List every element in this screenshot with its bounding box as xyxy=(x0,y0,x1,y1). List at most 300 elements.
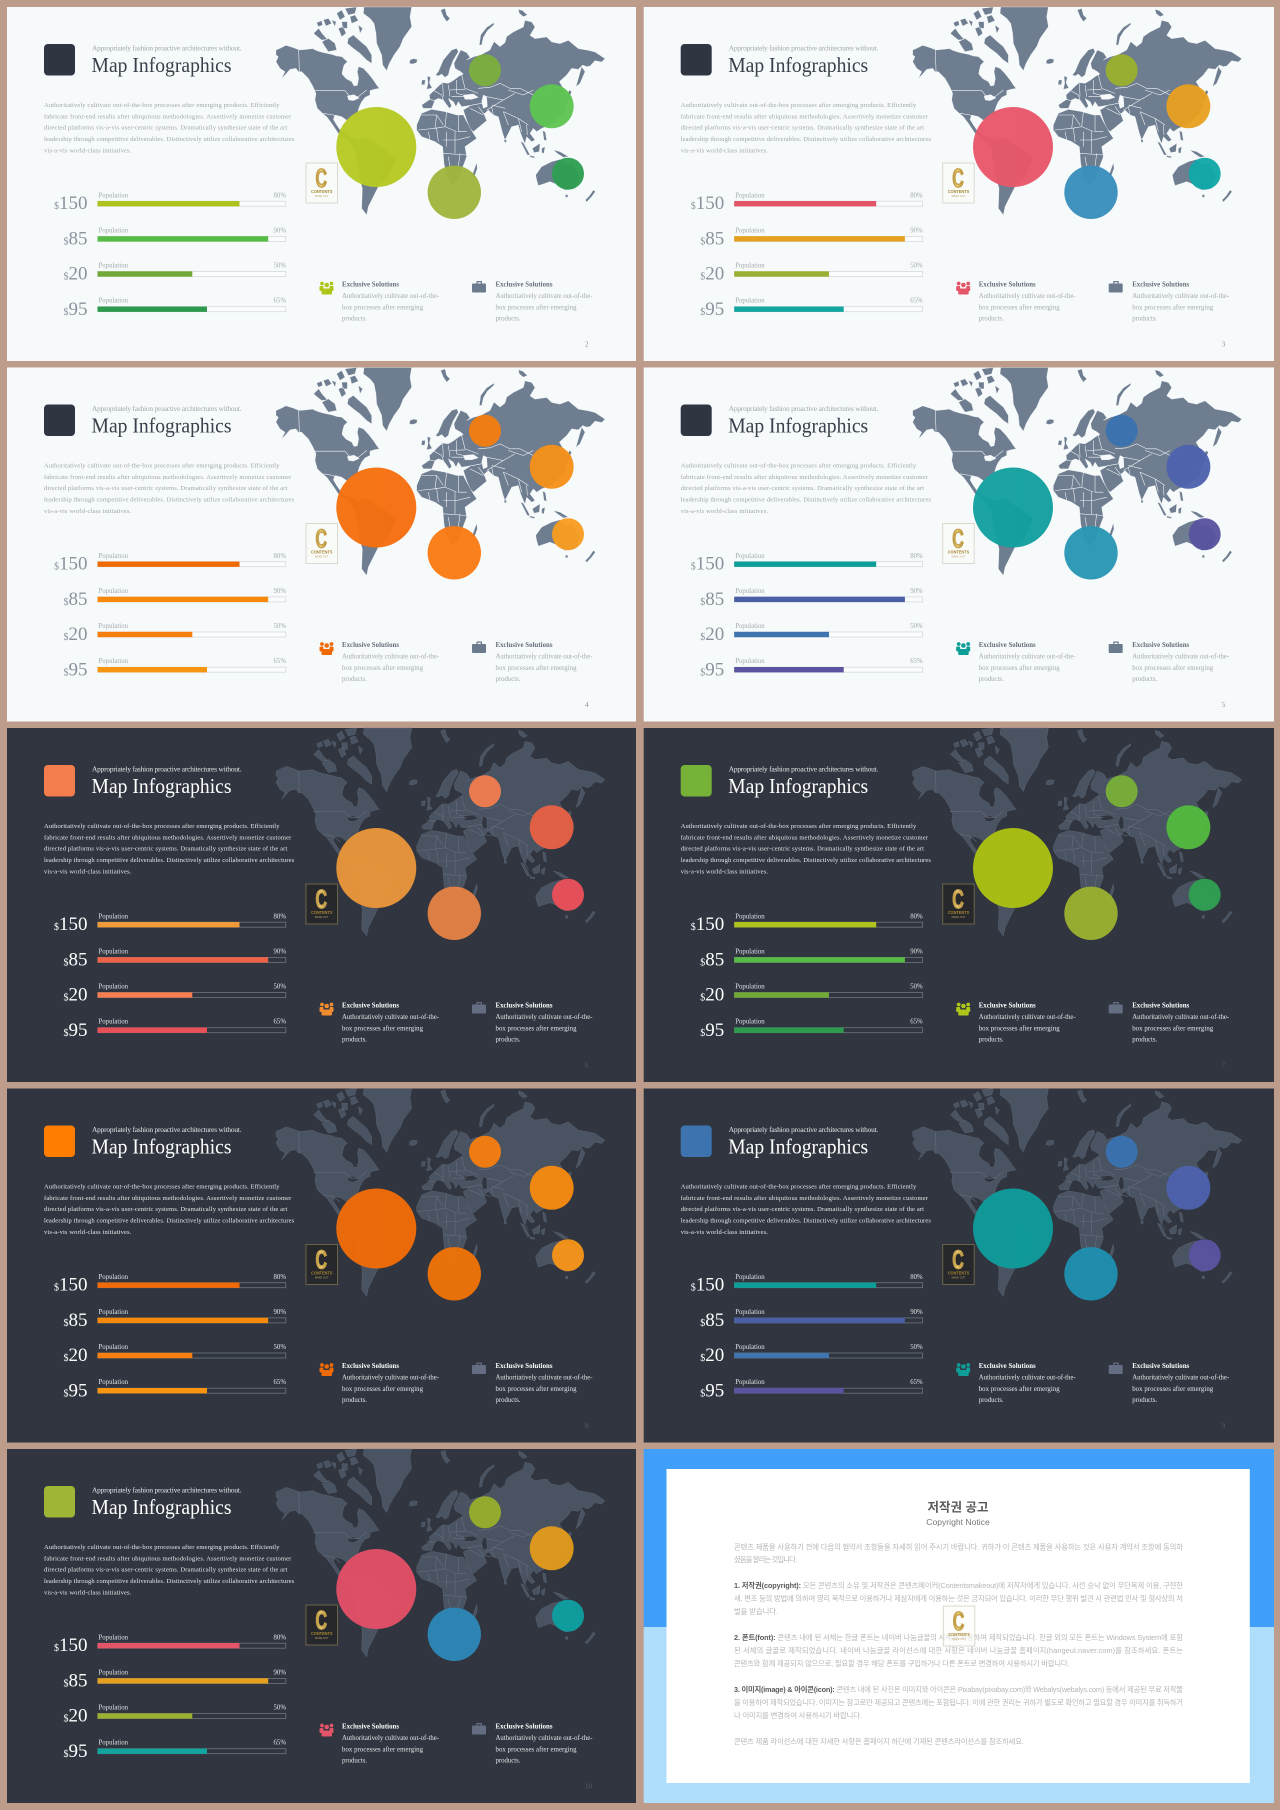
paragraph: directed platforms vis-a-vis user-centric systems. Dramatically synthesize state of the art xyxy=(681,1206,924,1213)
logo xyxy=(306,1244,338,1284)
stat row 4: Population xyxy=(98,1379,129,1386)
map bubbles xyxy=(973,1136,1221,1300)
icon: briefcase xyxy=(1109,281,1123,292)
paragraph: vis-a-vis world-class initiatives. xyxy=(44,508,132,515)
map bubbles xyxy=(973,775,1221,940)
notice body: 1. 저작권(copyright): 모든 콘텐츠의 소유 및 저작권은 콘텐츠메이커(Contentsmakeout)에 저작자에게 있습니다. 사전 승낙 없이 무단복제 이용, 구현한 xyxy=(734,1581,1183,1590)
stat row 3 xyxy=(64,623,286,645)
feature 1: Authoritatively cultivate out-of-the- xyxy=(979,1014,1076,1021)
paragraph: directed platforms vis-a-vis user-centric systems. Dramatically synthesize state of the art xyxy=(681,125,924,132)
stat row 4 xyxy=(64,298,286,320)
notice body: 된 서체의 글꼴로 제작되었습니다. 네이버 나눔글꼴 라이선스에 대한 사항은 네이버 나눔글꼴 홈페이지(hangeul.naver.com)를 참조하세요. 폰트는 xyxy=(734,1646,1183,1655)
logo: MAKE OUT xyxy=(315,1636,329,1640)
feature 1: Exclusive Solutions xyxy=(342,1363,399,1370)
icon square xyxy=(681,404,712,436)
icon square xyxy=(44,44,75,76)
stat row 4: 65% xyxy=(274,1018,286,1026)
notice body: 콘텐츠와 함께 제공되지 않으므로, 필요할 경우 해당 폰트를 구입하거나 다른 폰트로 변경하여 사용하시기 바랍니다. xyxy=(734,1659,1070,1668)
stat row 4: 65% xyxy=(274,1379,286,1386)
logo: MAKE OUT xyxy=(952,1637,966,1641)
stat row 3: 50% xyxy=(274,1344,286,1351)
stat row 2: $85 xyxy=(64,228,88,250)
stat row 4: Population xyxy=(98,1018,129,1026)
paragraph xyxy=(681,462,931,515)
feature 1 xyxy=(320,1002,440,1044)
feature 2: box processes after emerging xyxy=(496,1025,577,1032)
stat row 3: Population xyxy=(98,1704,129,1712)
stat row 1: 80% xyxy=(910,913,923,920)
page number: 7 xyxy=(1222,1062,1226,1070)
feature 1 xyxy=(320,642,440,683)
paragraph: Authoritatively cultivate out-of-the-box processes after emerging products. Efficiently xyxy=(681,462,917,470)
title: Map Infographics xyxy=(728,774,868,798)
icon: briefcase xyxy=(1109,642,1123,653)
stat row 2: 90% xyxy=(910,227,923,234)
logo: C xyxy=(316,524,327,554)
feature 2: Authoritatively cultivate out-of-the- xyxy=(496,1014,593,1021)
feature 2 xyxy=(472,642,593,683)
stat row 2: Population xyxy=(98,588,129,595)
feature 2: box processes after emerging xyxy=(1132,665,1214,672)
paragraph: Authoritatively cultivate out-of-the-box processes after emerging products. Efficiently xyxy=(44,462,280,470)
title: Map Infographics xyxy=(92,1495,232,1519)
feature 2: products. xyxy=(1132,1397,1157,1404)
stat row 1: $150 xyxy=(54,1274,88,1296)
icon: people xyxy=(956,282,970,294)
subtitle: Appropriately fashion proactive architectures without. xyxy=(92,1486,242,1494)
feature 1: Exclusive Solutions xyxy=(979,642,1036,649)
stat row 2 xyxy=(700,227,923,250)
stat row 4: $95 xyxy=(700,1380,724,1402)
paragraph: leadership through competitive deliverables. Distinctively utilize collaborative architectures xyxy=(44,857,295,864)
paragraph xyxy=(681,1184,931,1236)
stat row 3: 50% xyxy=(910,262,923,270)
subtitle: Appropriately fashion proactive architectures without. xyxy=(729,404,878,413)
icon: people xyxy=(320,1724,334,1736)
feature 1: box processes after emerging xyxy=(979,1025,1060,1032)
stat row 1: Population xyxy=(98,1274,129,1281)
feature 2: box processes after emerging xyxy=(1132,1386,1214,1393)
subtitle: Appropriately fashion proactive architectures without. xyxy=(92,44,242,52)
feature 2: box processes after emerging xyxy=(496,1746,577,1753)
icon: briefcase xyxy=(472,281,486,292)
panel: copyright notice xyxy=(644,1449,1274,1803)
panel: slide 8 dark orange xyxy=(7,1088,636,1442)
stat row 1: 80% xyxy=(274,553,286,560)
paragraph: directed platforms vis-a-vis user-centric systems. Dramatically synthesize state of the art xyxy=(44,846,287,853)
map bubbles xyxy=(336,1496,584,1661)
feature 2: products. xyxy=(496,1758,521,1765)
stat row 2 xyxy=(64,1669,286,1692)
stat row 3: 50% xyxy=(910,984,923,990)
title: Map Infographics xyxy=(728,414,868,438)
feature 2: products. xyxy=(1132,1037,1157,1044)
stat row 1 xyxy=(691,553,923,574)
notice body: 3. 이미지(image) & 아이콘(icon): 콘텐츠 내에 된 사진은 이미지와 아이콘은 Pixabay(pixabay.com)와 Webalys(webalys.com) 등에서 제공된 무료 저작물 xyxy=(734,1685,1183,1694)
stat row 4: $95 xyxy=(64,660,88,680)
stat row 4: $95 xyxy=(700,1020,724,1041)
page number: 5 xyxy=(1222,701,1226,709)
subtitle: Appropriately fashion proactive architectures without. xyxy=(92,764,242,774)
stat row 1 xyxy=(691,192,923,214)
stat row 4 xyxy=(700,658,923,680)
feature 2: box processes after emerging xyxy=(496,1386,577,1393)
stat row 1 xyxy=(54,553,286,574)
stat row 4 xyxy=(700,298,923,320)
feature 1: products. xyxy=(342,676,367,683)
notice heading: 저작권 공고 xyxy=(928,1500,988,1514)
stat row 2 xyxy=(700,948,923,970)
world map xyxy=(913,1088,1242,1296)
stat row 3: $20 xyxy=(64,624,88,645)
stat row 4: 65% xyxy=(274,658,286,665)
notice body: 셨음을 알리는 것입니다. xyxy=(734,1555,797,1564)
icon square xyxy=(44,1126,75,1157)
feature 2: Exclusive Solutions xyxy=(1132,1002,1190,1010)
feature 1: Authoritatively cultivate out-of-the- xyxy=(979,293,1076,300)
stat row 2: $85 xyxy=(700,228,724,250)
feature 2: products. xyxy=(496,1397,521,1404)
stat row 3 xyxy=(700,984,923,1006)
subtitle: Appropriately fashion proactive architectures without. xyxy=(729,44,878,52)
stat row 4: $95 xyxy=(700,299,724,320)
paragraph xyxy=(44,1544,295,1596)
panel: slide 7 dark green xyxy=(644,728,1274,1082)
paragraph: vis-a-vis world-class initiatives. xyxy=(44,1229,132,1236)
logo: MAKE OUT xyxy=(315,194,329,198)
stat row 3 xyxy=(700,262,923,284)
stat row 3: 50% xyxy=(274,1704,286,1712)
logo xyxy=(306,1605,338,1645)
feature 2: Exclusive Solutions xyxy=(496,1363,553,1370)
stat row 1: $150 xyxy=(691,1274,724,1296)
paragraph: fabricate front-end results after ubiquitous methodologies. Assertively monetize customer xyxy=(44,474,292,481)
stat row 2: 90% xyxy=(274,948,286,955)
feature 2: box processes after emerging xyxy=(1132,304,1214,311)
stat row 4: $95 xyxy=(64,299,88,320)
stat row 1: 80% xyxy=(274,1274,286,1281)
feature 1: Authoritatively cultivate out-of-the- xyxy=(342,1374,440,1382)
stat row 2: 90% xyxy=(274,1309,286,1316)
feature 1: box processes after emerging xyxy=(979,665,1060,672)
world map xyxy=(913,367,1242,575)
logo: C xyxy=(316,1244,327,1274)
stat row 2: 90% xyxy=(910,588,923,595)
logo: CONTENTS xyxy=(948,1632,970,1637)
stat row 1: Population xyxy=(98,913,129,920)
feature 2 xyxy=(472,281,593,323)
world map xyxy=(276,1449,605,1657)
panel: slide 5 light teal xyxy=(644,367,1274,722)
stat row 2: Population xyxy=(735,227,765,234)
title: Map Infographics xyxy=(728,53,868,77)
stat row 2 xyxy=(700,1309,923,1331)
panel: slide 4 light orange xyxy=(7,367,636,722)
notice body: 2. 폰트(font): 콘텐츠 내에 된 서체는 한글 폰트는 네이버 나눔글꼴의 서체를 사용하여 제작되었습니다. 한글 외의 모든 폰트는 Windows System에 포함 xyxy=(734,1633,1183,1642)
page number: 10 xyxy=(585,1782,592,1790)
stat row 2: $85 xyxy=(64,589,88,610)
stat row 3: Population xyxy=(735,623,765,630)
stat row 1: 80% xyxy=(274,192,286,199)
paragraph: directed platforms vis-a-vis user-centric systems. Dramatically synthesize state of the art xyxy=(681,846,924,853)
feature 1: Exclusive Solutions xyxy=(342,1002,399,1010)
paragraph xyxy=(44,823,295,875)
feature 1: Authoritatively cultivate out-of-the- xyxy=(342,1735,440,1742)
feature 2: Exclusive Solutions xyxy=(1132,642,1190,649)
logo: C xyxy=(952,163,964,193)
world map xyxy=(913,7,1242,215)
feature 2: Authoritatively cultivate out-of-the- xyxy=(496,654,593,660)
stat row 4 xyxy=(64,1379,286,1402)
stat row 1: $150 xyxy=(691,193,724,214)
stat row 2: $85 xyxy=(700,589,724,610)
icon: briefcase xyxy=(472,642,486,653)
logo xyxy=(943,524,974,564)
stat row 2 xyxy=(64,227,286,250)
feature 1: Authoritatively cultivate out-of-the- xyxy=(979,654,1076,660)
subtitle: Appropriately fashion proactive architectures without. xyxy=(92,1125,242,1134)
feature 2 xyxy=(472,1723,593,1765)
stat row 1: Population xyxy=(98,192,129,199)
stat row 3: $20 xyxy=(700,984,724,1006)
map bubbles xyxy=(336,54,584,219)
logo xyxy=(943,884,974,924)
stat row 4 xyxy=(64,1740,286,1762)
notice body: 새, 변조 등의 방법에 의하여 영리 목적으로 이용하거나 제삼자에게 이용하는 것은 금지되어 있습니다. 이러한 무단 행위 발견 시 관련법 민사 및 형사상의 처 xyxy=(734,1594,1183,1603)
logo: CONTENTS xyxy=(948,910,969,915)
stat row 1: $150 xyxy=(54,554,88,574)
stat row 3: Population xyxy=(98,623,129,630)
stat row 4: $95 xyxy=(64,1020,88,1041)
stat row 3 xyxy=(700,623,923,645)
logo: C xyxy=(316,163,327,193)
stat row 3 xyxy=(64,1704,286,1726)
paragraph: leadership through competitive deliverables. Distinctively utilize collaborative architectures xyxy=(44,136,295,143)
feature 2: Exclusive Solutions xyxy=(496,1002,553,1010)
feature 1: Exclusive Solutions xyxy=(342,642,399,649)
paragraph: leadership through competitive deliverables. Distinctively utilize collaborative architectures xyxy=(681,1218,931,1224)
feature 1: products. xyxy=(342,1758,367,1765)
logo xyxy=(306,524,338,564)
logo: MAKE OUT xyxy=(952,915,966,919)
notice body xyxy=(734,1542,1183,1746)
feature 1: Exclusive Solutions xyxy=(979,1363,1036,1370)
stat row 3 xyxy=(64,984,286,1006)
feature 2: Authoritatively cultivate out-of-the- xyxy=(496,1374,593,1382)
stat row 1: Population xyxy=(735,1274,765,1281)
title: Map Infographics xyxy=(92,53,232,77)
stat row 4: 65% xyxy=(274,298,286,304)
feature 1: Exclusive Solutions xyxy=(342,1724,399,1730)
paragraph: vis-a-vis world-class initiatives. xyxy=(44,1589,132,1596)
stat row 1: Population xyxy=(735,192,765,199)
feature 1: Exclusive Solutions xyxy=(979,282,1036,288)
stat row 4: Population xyxy=(735,1379,765,1386)
feature 2: Exclusive Solutions xyxy=(496,1724,553,1730)
stat row 2 xyxy=(64,588,286,610)
panel: slide 6 dark coral xyxy=(7,728,636,1082)
stat row 1: 80% xyxy=(910,192,923,199)
stat row 3: Population xyxy=(98,262,129,270)
logo: MAKE OUT xyxy=(952,554,966,558)
logo: CONTENTS xyxy=(311,910,333,915)
stat row 2: Population xyxy=(98,1309,129,1316)
feature 1 xyxy=(956,282,1076,323)
stat row 4 xyxy=(700,1379,923,1402)
paragraph: directed platforms vis-a-vis user-centric systems. Dramatically synthesize state of the art xyxy=(44,1567,287,1574)
panel: slide 3 light multicolor xyxy=(644,7,1274,361)
title: Map Infographics xyxy=(92,774,232,798)
stat row 1: 80% xyxy=(910,553,923,560)
feature 2: Exclusive Solutions xyxy=(496,642,553,649)
feature 2: box processes after emerging xyxy=(496,665,577,672)
title: Map Infographics xyxy=(728,1134,868,1158)
paragraph: leadership through competitive deliverables. Distinctively utilize collaborative architectures xyxy=(681,857,931,864)
stat row 4: $95 xyxy=(64,1380,88,1402)
feature 2: products. xyxy=(1132,676,1157,683)
logo: CONTENTS xyxy=(311,1631,333,1636)
feature 1 xyxy=(956,1363,1076,1404)
stat row 2: Population xyxy=(735,1309,765,1316)
paragraph: directed platforms vis-a-vis user-centric systems. Dramatically synthesize state of the art xyxy=(44,125,287,132)
feature 2: Exclusive Solutions xyxy=(1132,1363,1190,1370)
paragraph: fabricate front-end results after ubiquitous methodologies. Assertively monetize customer xyxy=(44,834,292,841)
page number: 4 xyxy=(585,701,589,709)
logo: CONTENTS xyxy=(311,550,333,554)
logo: CONTENTS xyxy=(948,1270,969,1276)
paragraph: Authoritatively cultivate out-of-the-box processes after emerging products. Efficiently xyxy=(44,1184,280,1190)
feature 2: Authoritatively cultivate out-of-the- xyxy=(1132,1374,1230,1382)
logo xyxy=(306,884,338,924)
icon: people xyxy=(320,642,334,655)
logo: MAKE OUT xyxy=(952,1276,966,1280)
feature 1 xyxy=(320,1724,440,1765)
icon square xyxy=(681,765,712,796)
feature 2: products. xyxy=(496,676,521,683)
feature 1: box processes after emerging xyxy=(342,1025,424,1032)
paragraph: fabricate front-end results after ubiquitous methodologies. Assertively monetize customer xyxy=(681,113,929,120)
stat row 2: Population xyxy=(735,948,765,955)
stat row 2: $85 xyxy=(700,1310,724,1331)
stat row 4: 65% xyxy=(910,658,923,665)
stat row 3: $20 xyxy=(700,264,724,284)
paragraph: fabricate front-end results after ubiquitous methodologies. Assertively monetize customer xyxy=(681,474,929,481)
world map xyxy=(276,367,605,575)
paragraph: fabricate front-end results after ubiquitous methodologies. Assertively monetize customer xyxy=(44,1195,292,1202)
map bubbles xyxy=(336,1136,584,1300)
icon: briefcase xyxy=(1109,1002,1123,1014)
stat row 2: Population xyxy=(98,1669,129,1676)
stat row 4: Population xyxy=(735,658,765,665)
feature 1: products. xyxy=(979,1397,1004,1404)
stat row 4 xyxy=(700,1018,923,1041)
logo: MAKE OUT xyxy=(952,194,966,198)
stat row 1 xyxy=(691,1274,923,1296)
stat row 1 xyxy=(54,192,286,214)
feature 1: products. xyxy=(342,1037,367,1044)
icon: people xyxy=(956,1363,970,1376)
paragraph: Authoritatively cultivate out-of-the-box processes after emerging products. Efficiently xyxy=(681,1184,917,1190)
stat row 4 xyxy=(64,658,286,680)
paragraph: leadership through competitive deliverables. Distinctively utilize collaborative architectures xyxy=(44,1218,295,1224)
stat row 2 xyxy=(64,1309,286,1331)
stat row 1: Population xyxy=(735,553,765,560)
logo: CONTENTS xyxy=(311,189,333,194)
paragraph xyxy=(681,823,931,875)
stat row 2: Population xyxy=(98,227,129,234)
paragraph xyxy=(44,102,295,154)
stat row 2: 90% xyxy=(274,588,286,595)
feature 1: Exclusive Solutions xyxy=(342,282,399,288)
icon square xyxy=(44,404,75,436)
icon: people xyxy=(320,282,334,294)
feature 2: Exclusive Solutions xyxy=(1132,282,1190,288)
paragraph: Authoritatively cultivate out-of-the-box processes after emerging products. Efficiently xyxy=(44,823,280,830)
page number: 9 xyxy=(1222,1422,1226,1430)
title: Map Infographics xyxy=(92,1134,232,1158)
subtitle: Appropriately fashion proactive architectures without. xyxy=(729,764,878,774)
stat row 3: 50% xyxy=(274,984,286,990)
paragraph: leadership through competitive deliverables. Distinctively utilize collaborative architectures xyxy=(681,496,931,504)
feature 1 xyxy=(956,642,1076,683)
map bubbles xyxy=(973,54,1221,219)
world map xyxy=(913,728,1242,936)
feature 1: box processes after emerging xyxy=(979,304,1060,311)
paragraph: leadership through competitive deliverables. Distinctively utilize collaborative architectures xyxy=(681,136,931,143)
logo: MAKE OUT xyxy=(315,554,329,558)
feature 1: box processes after emerging xyxy=(979,1386,1060,1393)
world map xyxy=(276,1088,605,1296)
stat row 3: $20 xyxy=(64,1706,88,1726)
notice body: 콘텐츠 제품 라이선스에 대한 자세한 사항은 홈페이지 하단에 기재된 콘텐츠라이선스를 참조하세요. xyxy=(734,1737,1024,1746)
paragraph xyxy=(681,102,931,154)
feature 2: box processes after emerging xyxy=(1132,1025,1214,1032)
feature 1: products. xyxy=(979,676,1004,683)
feature 2 xyxy=(1109,1362,1230,1404)
logo: C xyxy=(952,1244,964,1274)
paragraph: vis-a-vis world-class initiatives. xyxy=(44,868,132,875)
feature 2: Authoritatively cultivate out-of-the- xyxy=(1132,1014,1230,1021)
stat row 2: $85 xyxy=(64,1310,88,1331)
paragraph: fabricate front-end results after ubiquitous methodologies. Assertively monetize customer xyxy=(681,1195,929,1202)
feature 1: box processes after emerging xyxy=(342,304,424,311)
paragraph: Authoritatively cultivate out-of-the-box processes after emerging products. Efficiently xyxy=(681,823,917,830)
feature 2: Exclusive Solutions xyxy=(496,282,553,288)
logo: C xyxy=(952,884,964,914)
feature 2: Authoritatively cultivate out-of-the- xyxy=(1132,654,1230,660)
icon square xyxy=(681,1126,712,1157)
title: Map Infographics xyxy=(92,414,232,438)
stat row 2: $85 xyxy=(64,950,88,970)
logo: CONTENTS xyxy=(311,1270,333,1276)
feature 1 xyxy=(956,1002,1076,1044)
stat row 3: Population xyxy=(98,1344,129,1351)
stat row 3: 50% xyxy=(274,623,286,630)
feature 2: products. xyxy=(496,316,521,323)
paragraph: fabricate front-end results after ubiquitous methodologies. Assertively monetize customer xyxy=(44,1555,292,1562)
stat row 4: Population xyxy=(98,298,129,304)
stat row 1 xyxy=(54,1634,286,1656)
icon: briefcase xyxy=(1109,1362,1123,1374)
stat row 3: 50% xyxy=(274,262,286,270)
logo: C xyxy=(316,1605,327,1635)
paragraph: vis-a-vis world-class initiatives. xyxy=(681,508,768,515)
map bubbles xyxy=(336,775,584,940)
stat row 4: 65% xyxy=(274,1740,286,1746)
feature 2: products. xyxy=(1132,316,1157,323)
stat row 3 xyxy=(64,1344,286,1366)
stat row 4 xyxy=(64,1018,286,1041)
